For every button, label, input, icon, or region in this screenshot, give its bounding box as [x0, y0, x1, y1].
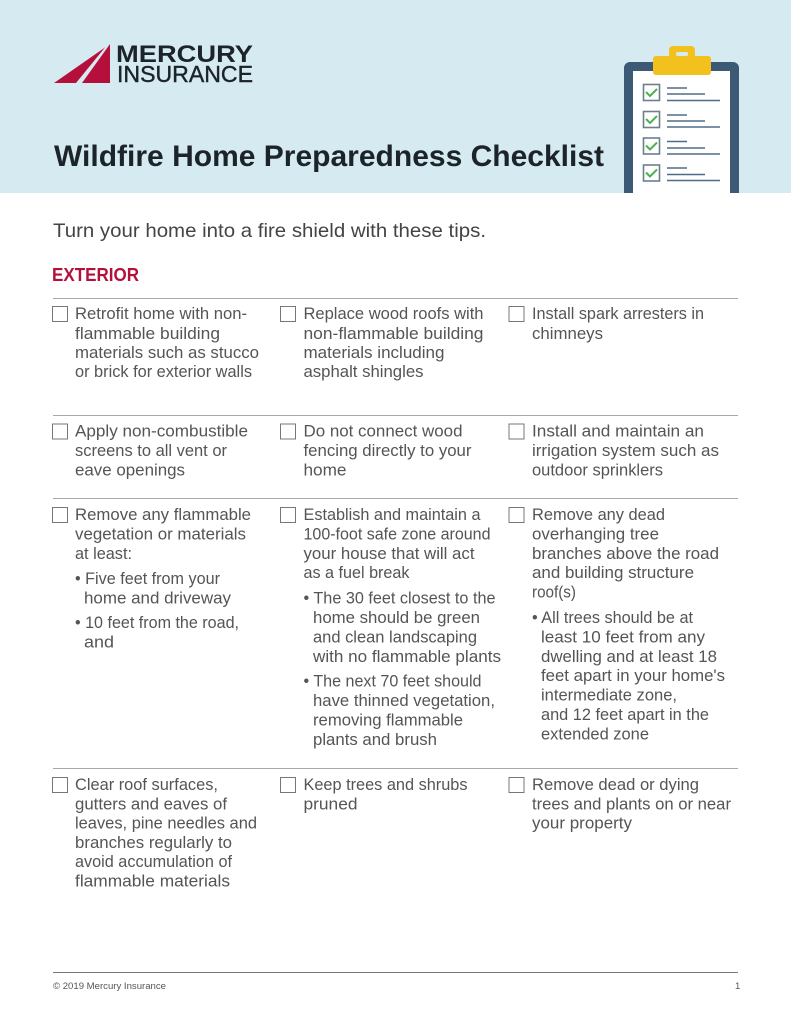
checklist item: dead branches: extended zone — [541, 726, 649, 744]
checklist item: dead branches: and 12 feet apart in the — [541, 706, 709, 724]
checklist item: replace wood roofs: non-flammable building — [304, 325, 484, 343]
checklist item: dead branches: and building structure — [532, 564, 694, 582]
checklist item: dead branches: dwelling and at least 18 — [541, 648, 717, 666]
checklist item: safe zone: and clean landscaping — [313, 628, 477, 646]
checklist item: safe zone: your house that will act — [304, 545, 475, 563]
checklist item: wood fencing: home — [304, 462, 346, 480]
checklist item: replace wood roofs: materials including — [304, 344, 444, 362]
checklist item: clear roof: leaves, pine needles and — [75, 814, 257, 832]
checklist item: dead branches: feet apart in your home's — [541, 667, 725, 685]
checklist item: replace wood roofs — [280, 305, 484, 381]
checklist item: safe zone: home should be green — [313, 609, 480, 627]
page number: 1 — [735, 981, 740, 992]
checklist item: safe zone: have thinned vegetation, — [313, 692, 495, 710]
checklist item: remove vegetation: home and driveway — [84, 590, 232, 608]
logo: Mercury Insurance — [54, 41, 253, 87]
checklist item: prune — [280, 776, 468, 814]
footer copyright: © 2019 Mercury Insurance — [53, 981, 166, 992]
checklist item: spark arresters: chimneys — [532, 325, 603, 343]
checklist item: safe zone — [280, 506, 501, 749]
checklist item: screens — [52, 422, 248, 480]
checklist item: remove vegetation: • Five feet from your — [75, 570, 221, 588]
checklist item: dead plants: trees and plants on or near — [532, 796, 732, 814]
checklist item: screens: screens to all vent or — [75, 442, 228, 460]
checklist item: screens: Apply non-combustible — [75, 422, 248, 440]
checklist item: dead plants: your property — [532, 814, 633, 832]
logo: Mercury Insurance: INSURANCE — [117, 61, 253, 87]
checklist item: irrigation: Install and maintain an — [532, 422, 704, 440]
checklist item: safe zone: Establish and maintain a — [304, 506, 481, 524]
checklist item: safe zone: • The next 70 feet should — [304, 672, 482, 690]
checklist item: remove vegetation: and — [84, 634, 114, 652]
checklist item: retrofit home: Retrofit home with non- — [75, 305, 247, 323]
logo: Mercury Insurance: MERCURY — [116, 41, 253, 68]
checklist item: irrigation: irrigation system such as — [532, 442, 719, 460]
checklist item: spark arresters — [509, 305, 704, 343]
checklist item: dead plants: Remove dead or dying — [532, 776, 699, 794]
checklist item: remove vegetation: at least: — [75, 545, 132, 563]
checklist item: dead branches: intermediate zone, — [541, 686, 677, 704]
checklist item: spark arresters: Install spark arresters in — [532, 305, 704, 323]
checklist item: safe zone: plants and brush — [313, 731, 437, 749]
checklist item: wood fencing — [280, 422, 472, 480]
checklist item: retrofit home — [52, 305, 259, 381]
checklist item: safe zone: removing flammable — [313, 712, 463, 730]
checklist item: prune: pruned — [304, 796, 358, 814]
checklist item: dead branches: overhanging tree — [532, 526, 659, 544]
checklist item: safe zone: 100-foot safe zone around — [304, 526, 490, 544]
checklist item: safe zone: as a fuel break — [304, 564, 410, 582]
checklist item: dead branches: Remove any dead — [532, 506, 665, 524]
checklist item: remove vegetation: Remove any flammable — [75, 506, 251, 524]
icon: clipboard — [624, 46, 739, 193]
checklist item: dead branches: roof(s) — [532, 584, 576, 602]
subtitle: Turn your home into a fire shield with these tips. — [53, 220, 486, 242]
header band — [0, 0, 791, 193]
checklist item: dead branches: • All trees should be at — [532, 609, 693, 627]
checklist item: remove vegetation: vegetation or materials — [75, 526, 246, 544]
checklist item: wood fencing: fencing directly to your — [304, 442, 472, 460]
checklist item: retrofit home: flammable building — [75, 325, 220, 343]
checklist item: replace wood roofs: asphalt shingles — [304, 363, 424, 381]
checklist item: replace wood roofs: Replace wood roofs with — [304, 305, 484, 323]
checklist item: retrofit home: materials such as stucco — [75, 344, 259, 362]
checklist item: irrigation: outdoor sprinklers — [532, 462, 663, 480]
checklist item: dead branches: branches above the road — [532, 545, 719, 563]
checklist item: clear roof: branches regularly to — [75, 834, 232, 852]
checklist item: clear roof: avoid accumulation of — [75, 853, 232, 871]
checklist item: remove vegetation — [52, 506, 251, 652]
checklist item: prune: Keep trees and shrubs — [304, 776, 468, 794]
checklist item: wood fencing: Do not connect wood — [304, 422, 462, 440]
checklist item: clear roof: flammable materials — [75, 872, 230, 890]
checklist item: retrofit home: or brick for exterior walls — [75, 363, 252, 381]
checklist item: remove vegetation: • 10 feet from the road, — [75, 614, 239, 632]
checklist item: safe zone: with no flammable plants — [312, 648, 501, 666]
checklist item: safe zone: • The 30 feet closest to the — [304, 590, 496, 608]
checklist item: dead branches — [509, 506, 725, 744]
title: Wildfire Home Preparedness Checklist — [54, 140, 604, 173]
checklist item: screens: eave openings — [75, 462, 185, 480]
checklist item: irrigation — [509, 422, 719, 480]
checklist item: clear roof — [52, 776, 257, 890]
checklist item: clear roof: gutters and eaves of — [75, 796, 227, 814]
checklist item: clear roof: Clear roof surfaces, — [75, 776, 218, 794]
checklist item: dead plants — [509, 776, 732, 832]
checklist item: dead branches: least 10 feet from any — [541, 628, 706, 646]
heading: exterior: EXTERIOR — [52, 264, 139, 285]
